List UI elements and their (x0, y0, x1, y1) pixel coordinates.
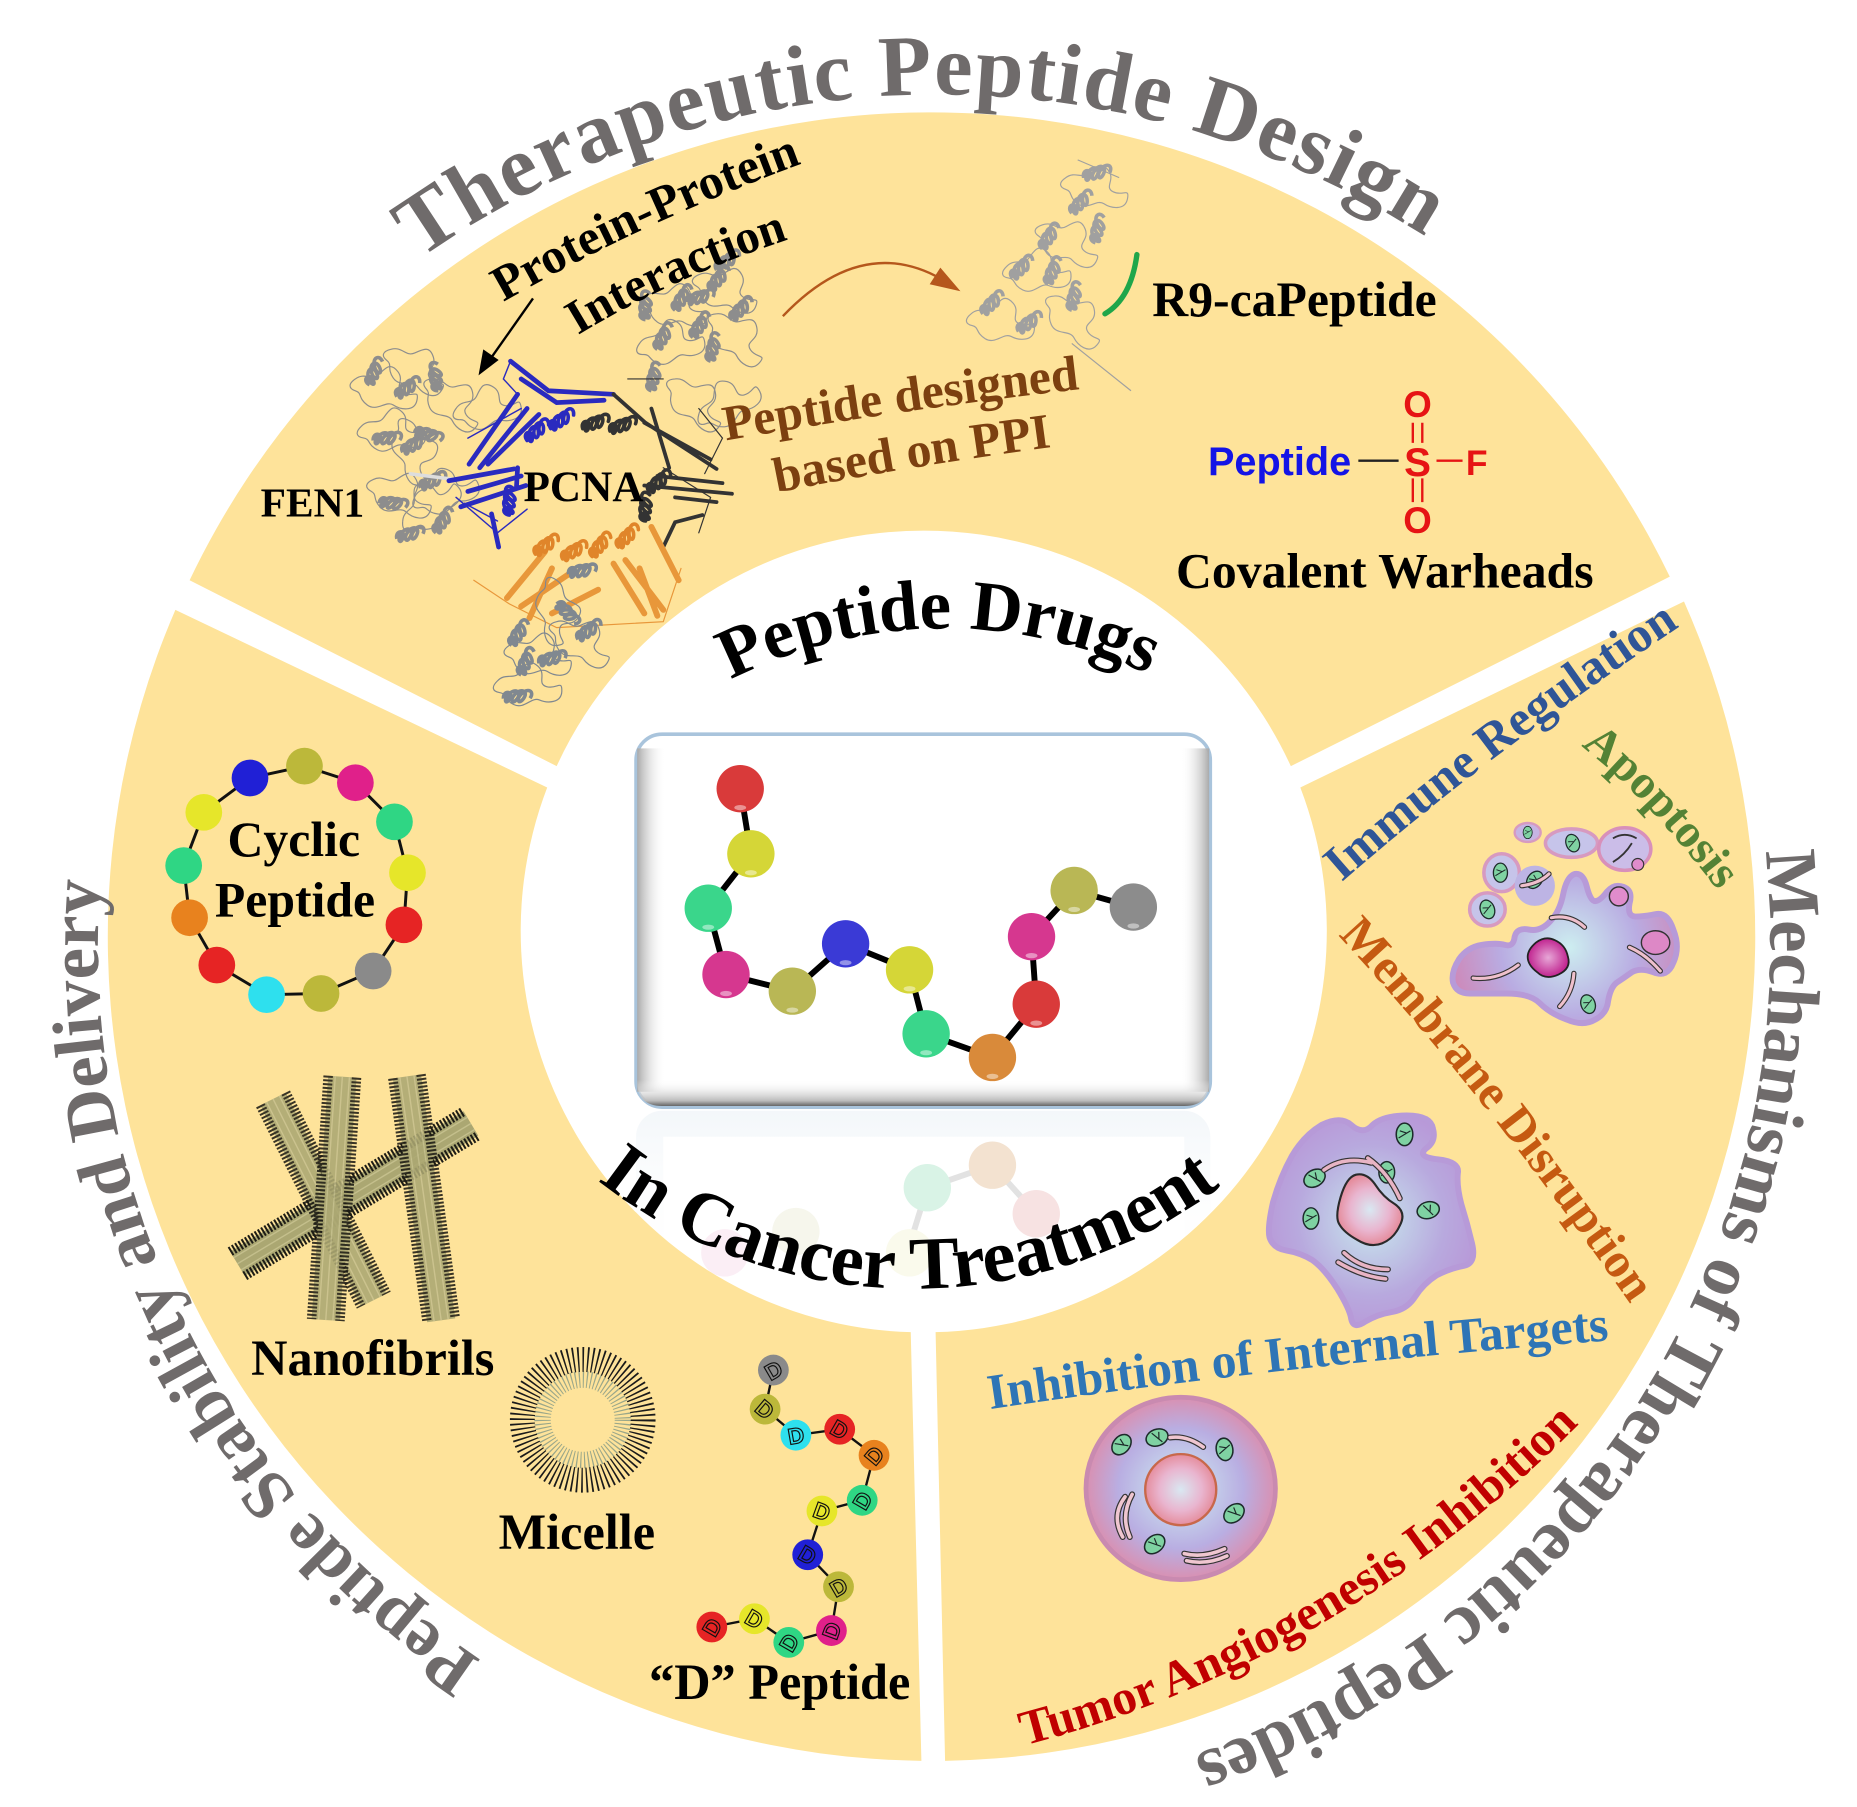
illustration: FEN1 structure with R9-caPeptide (965, 160, 1131, 391)
illustration: D peptide chain: D (810, 1497, 834, 1526)
chemical structure: covalent warhead: F (1466, 443, 1488, 483)
panel: peptide stability and delivery sector (108, 610, 921, 1761)
lower grey protein (490, 558, 619, 711)
panel: mechanisms of therapeutic peptides sector (936, 602, 1755, 1761)
label: Cyclic Peptide (215, 812, 375, 928)
label: R9-caPeptide: R9-caPeptide (1152, 272, 1437, 327)
illustration: D peptide chain: D (698, 1614, 727, 1641)
chemical structure: covalent warhead: S (1404, 440, 1431, 485)
heading: Peptide Drugs: Peptide Drugs (712, 580, 1158, 679)
heading: In Cancer Treatment: In Cancer Treatment (599, 1142, 1220, 1289)
label: Micelle: Micelle (499, 1504, 655, 1560)
chemical structure: covalent warhead (1208, 384, 1488, 541)
illustration: micelle (522, 1359, 643, 1480)
label: Tumor Angiogenesis Inhibition: Tumor Angiogenesis Inhibition (1016, 1412, 1578, 1744)
upper right grey protein (630, 250, 776, 441)
illustration: D peptide chain: D (794, 1541, 821, 1570)
label: Membrane Disruption: Membrane Disruption (1338, 914, 1646, 1304)
label: Apoptosis: Apoptosis (1581, 730, 1734, 888)
label: based on PPI: based on PPI (770, 415, 1050, 491)
label: FEN1: FEN1 (261, 479, 364, 525)
nucleus (1528, 938, 1569, 977)
label: Nanofibrils: Nanofibrils (251, 1330, 494, 1386)
label: Immune Regulation: Immune Regulation (1322, 610, 1679, 882)
label: Cyclic Peptide: Cyclic (228, 812, 360, 867)
heading: Peptide Stability and Delivery: Peptide Stability and Delivery (52, 879, 480, 1698)
illustration: D peptide chain: D (786, 1422, 806, 1450)
illustration: D peptide chain: D (826, 1573, 852, 1602)
dark PCNA subunit (582, 379, 732, 547)
illustration: nanofibrils (230, 1074, 478, 1322)
illustration: D peptide chain: D (860, 1442, 889, 1470)
label: Covalent Warheads: Covalent Warheads (1176, 543, 1594, 598)
label: Protein-Protein: Protein-Protein (488, 143, 802, 302)
illustration: PCNA FEN1 protein complex (350, 250, 776, 711)
illustration: membrane disrupted cell (1269, 1115, 1473, 1325)
arrow: interaction pointer (479, 298, 533, 375)
illustration: D peptide chain: D (750, 1395, 779, 1425)
illustration: D peptide chain: D (775, 1630, 804, 1656)
label: Inhibition of Internal Targets: Inhibition of Internal Targets (986, 1314, 1608, 1409)
heading: Therapeutic Peptide Design: Therapeutic Peptide Design (388, 38, 1438, 252)
panel: reflection of peptide card (636, 1111, 1210, 1291)
FEN1 grey protein (350, 336, 525, 545)
illustration: D peptide chain: D (818, 1619, 847, 1643)
illustration: round cancer cell (1086, 1397, 1275, 1580)
illustration: D peptide chain: D (760, 1356, 787, 1386)
chemical structure: covalent warhead: O (1403, 384, 1432, 425)
illustration: D peptide chain: D (741, 1605, 767, 1634)
label: "D" Peptide: “D” Peptide (649, 1654, 910, 1710)
panel: peptide chain card (636, 734, 1210, 1107)
chain bonds (708, 789, 1133, 1057)
chemical structure: covalent warhead: O (1403, 500, 1432, 541)
illustration: apoptotic cell (1453, 823, 1677, 1023)
illustration: cyclic peptide ring (165, 748, 426, 1013)
arrow: curved design arrow (783, 263, 960, 316)
blue PCNA subunit (449, 361, 614, 547)
label: Peptide designed: Peptide designed (721, 355, 1080, 442)
illustration: D peptide chain: D (826, 1415, 853, 1445)
illustration: D peptide chain (696, 1355, 889, 1658)
label: Interaction: Interaction (563, 220, 788, 334)
chemical structure: covalent warhead: Peptide (1208, 440, 1351, 484)
panel: therapeutic peptide design sector (190, 112, 1670, 766)
label: Cyclic Peptide: Peptide (215, 873, 375, 928)
amino acid beads (685, 765, 1157, 1081)
orange PCNA subunit (474, 523, 681, 628)
heading: Mechanisms of Therapeutic Peptides: Mechanisms of Therapeutic Peptides (1198, 849, 1820, 1786)
icon: green peptide (1105, 255, 1137, 314)
illustration: D peptide chain: D (848, 1487, 878, 1514)
label: PCNA: PCNA (524, 463, 644, 511)
